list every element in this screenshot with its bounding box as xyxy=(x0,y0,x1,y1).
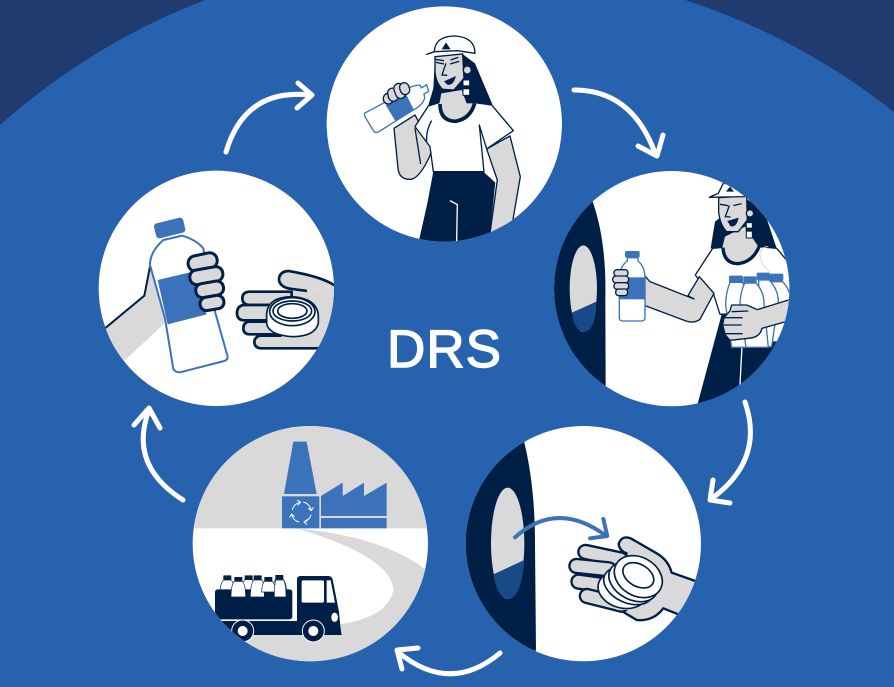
arrow 1 to 2 xyxy=(574,90,663,156)
arrow 3 to 4 xyxy=(397,648,500,674)
factory xyxy=(282,442,387,528)
earring xyxy=(463,66,471,95)
blue arrow xyxy=(515,518,607,538)
truck xyxy=(215,575,342,642)
sky band xyxy=(194,426,427,528)
open hand xyxy=(237,271,335,349)
machine wall xyxy=(466,442,536,651)
bottle xyxy=(150,217,228,372)
coins xyxy=(597,554,664,610)
bottle bundle xyxy=(726,280,791,347)
earring xyxy=(746,210,754,238)
step 1: person drinking from a bottle xyxy=(327,6,562,243)
t-shirt xyxy=(415,103,513,172)
held bottle xyxy=(619,251,645,321)
cap xyxy=(709,183,745,197)
pants xyxy=(418,172,495,243)
front bottles xyxy=(231,580,286,597)
right arm xyxy=(487,136,520,233)
arrow 2 to 3 xyxy=(710,402,750,503)
cap xyxy=(427,36,475,54)
t-shirt xyxy=(695,247,791,314)
fist xyxy=(383,81,411,104)
step 2: person returning a bottle to the machine xyxy=(550,165,792,406)
road xyxy=(235,528,426,662)
hand xyxy=(569,537,700,620)
left arm xyxy=(394,115,432,179)
neck and collar xyxy=(439,90,472,120)
arm and hand holding bundle xyxy=(723,299,792,340)
fist xyxy=(187,251,225,312)
back bottles xyxy=(220,579,287,590)
hair xyxy=(711,198,777,248)
bottle xyxy=(364,85,429,132)
arrow 4 to 5 xyxy=(134,408,183,500)
step 4: truck to recycling factory xyxy=(185,420,438,662)
step 5: bottle exchanged for coin xyxy=(95,171,335,406)
arm xyxy=(643,276,714,322)
face xyxy=(435,54,464,90)
title: DRS xyxy=(387,320,501,379)
neck and collar xyxy=(722,227,758,264)
coin xyxy=(267,297,318,337)
machine wall xyxy=(554,202,606,386)
pants xyxy=(698,314,782,404)
hair xyxy=(428,53,493,112)
machine slot xyxy=(570,245,597,332)
step 3: coins returned from machine xyxy=(460,420,701,663)
arm xyxy=(95,267,170,382)
machine slot xyxy=(491,488,524,599)
arrow 5 to 1 xyxy=(226,83,312,152)
recycle icon xyxy=(290,500,314,525)
face xyxy=(719,196,747,232)
fist xyxy=(613,270,629,296)
